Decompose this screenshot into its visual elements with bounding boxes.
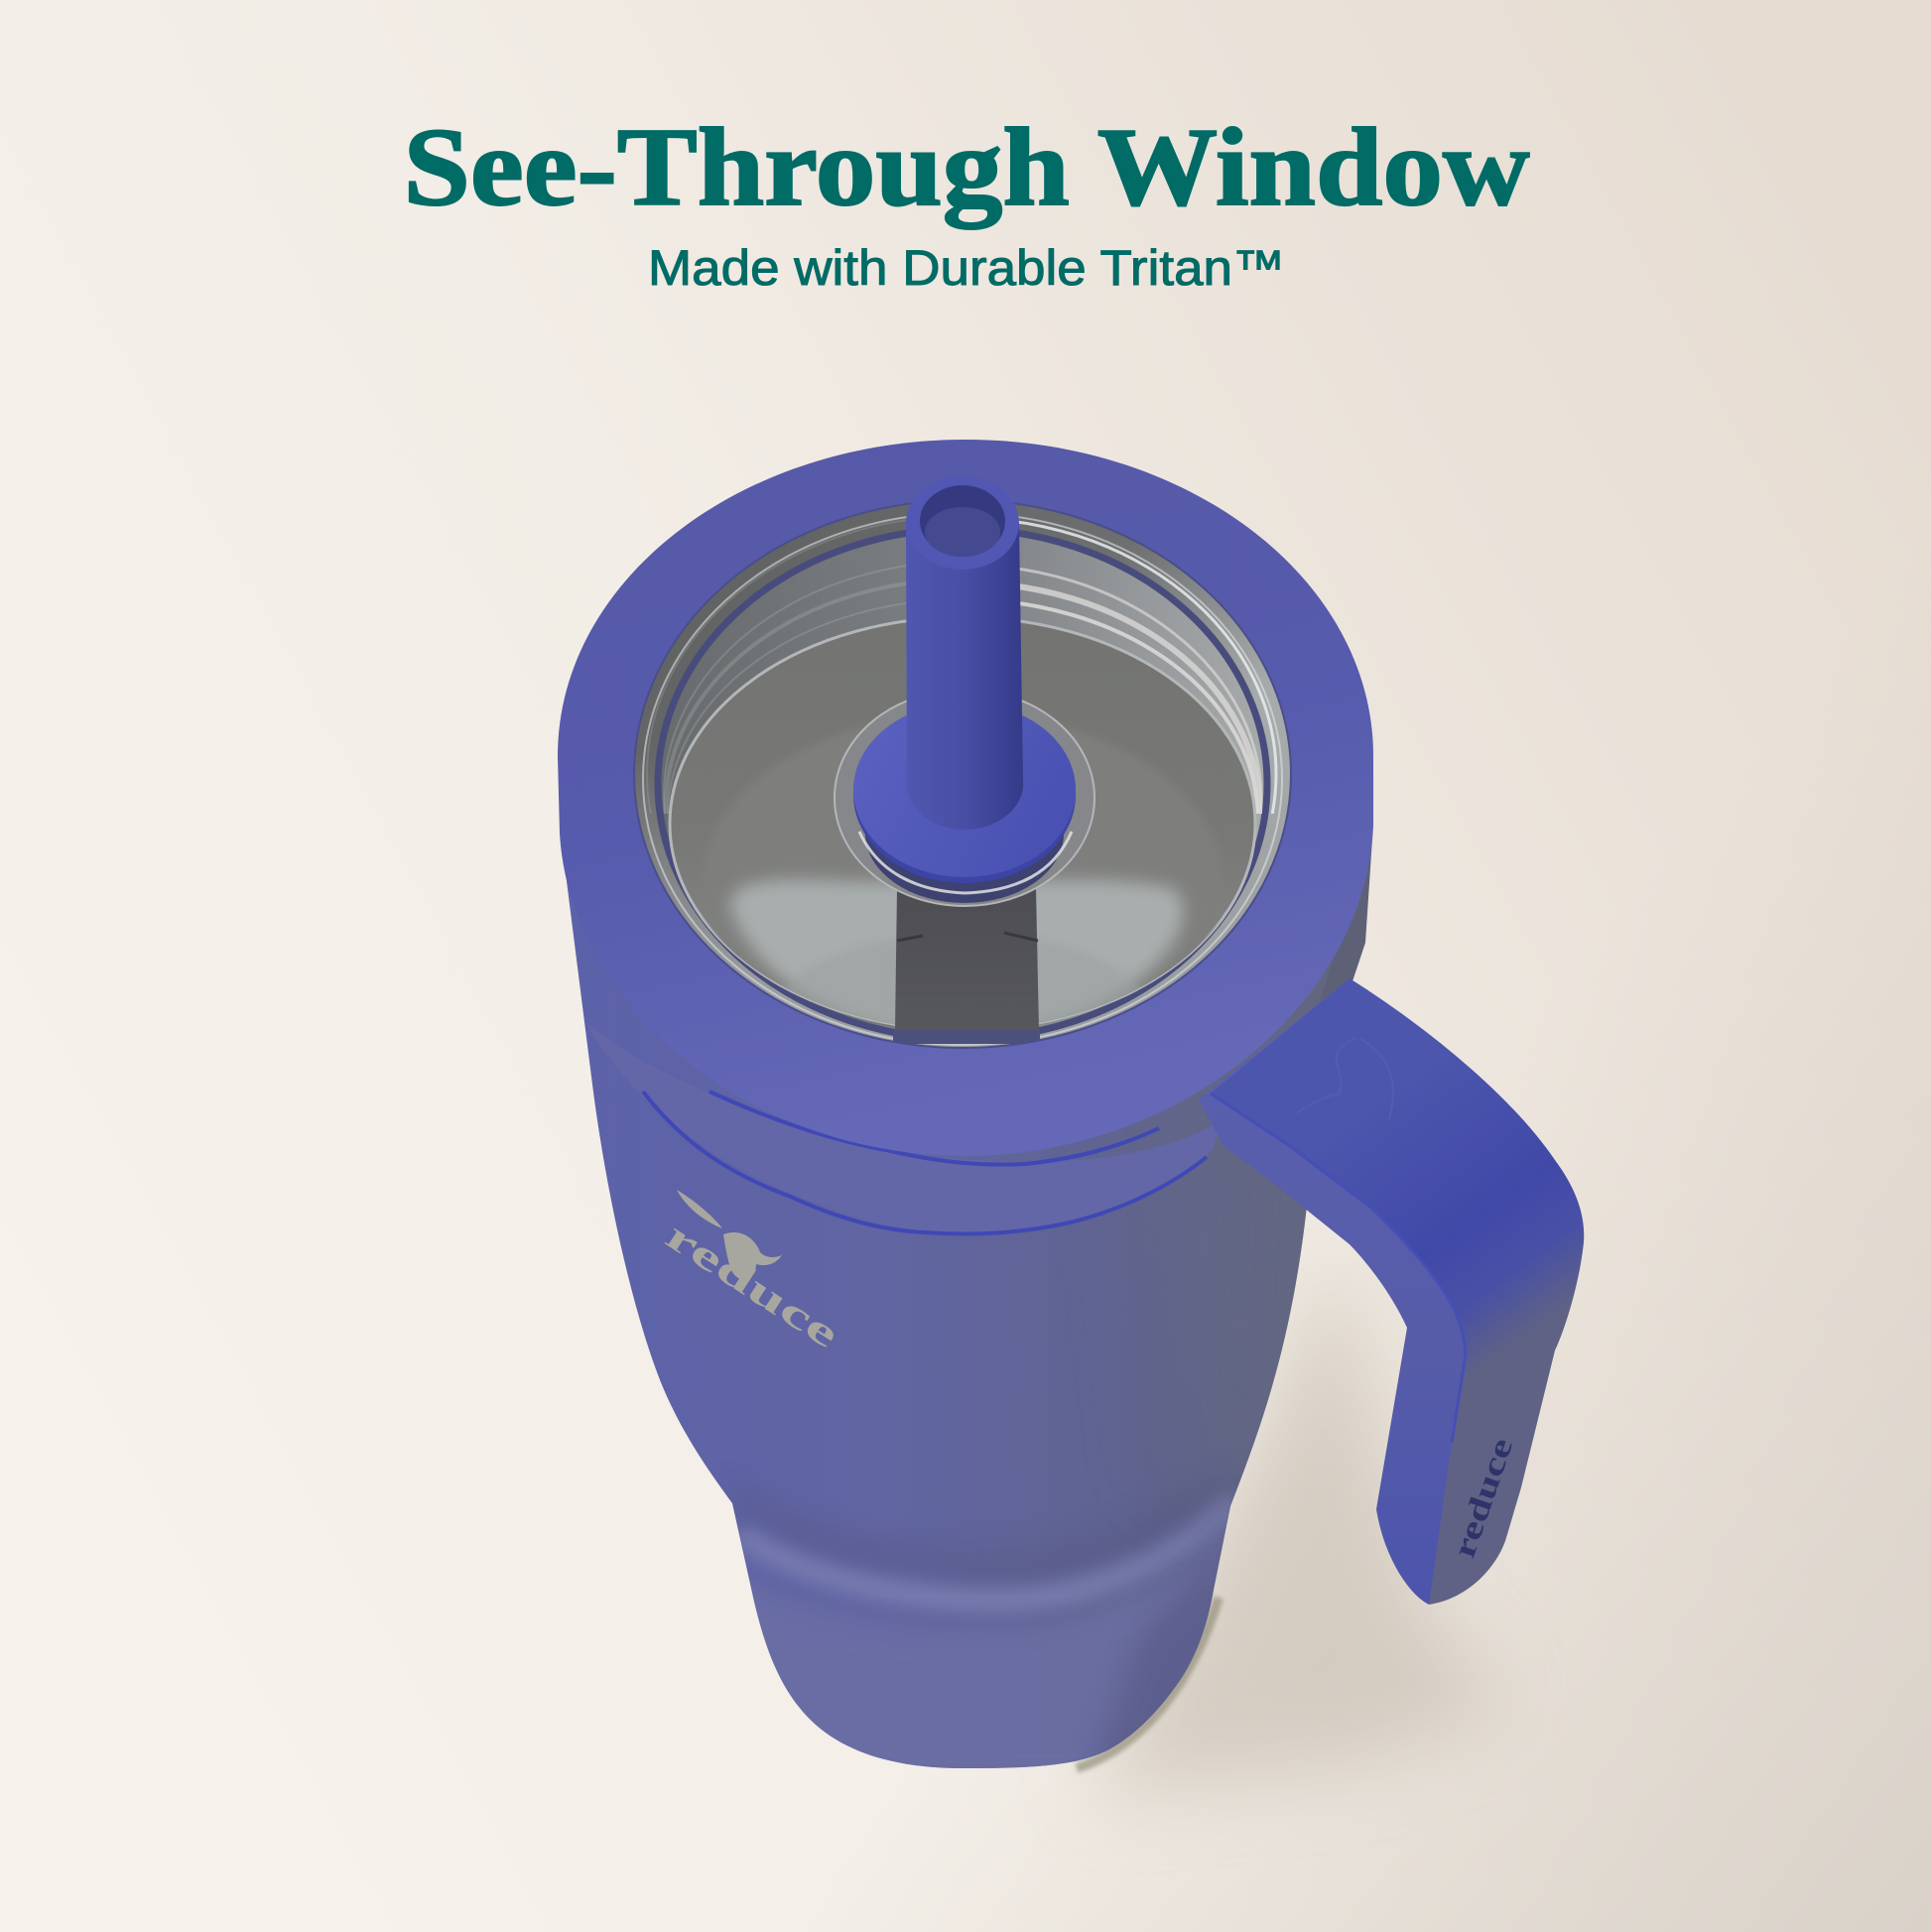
straw grommet [835, 690, 1094, 906]
lid rim [558, 440, 1373, 1156]
handle engraved wordmark: reduce [1446, 1433, 1519, 1562]
lower section lighter tone [749, 1524, 1226, 1768]
lid threads, right [1018, 520, 1278, 814]
tumbler [558, 440, 1584, 1796]
logo wordmark: reduce [658, 1213, 847, 1356]
straw [906, 476, 1023, 830]
right-side shade [1247, 1212, 1306, 1461]
logo leaves [677, 1190, 722, 1228]
handle side strip [1199, 978, 1583, 1605]
lower glass rim tone [634, 500, 1291, 1048]
lid threads, left [646, 519, 907, 814]
see-through window [633, 502, 1292, 1049]
handle front face [1211, 978, 1584, 1605]
subtitle: Made with Durable Tritan™ [648, 240, 1285, 296]
handle [1199, 978, 1584, 1605]
tumbler body [566, 873, 1350, 1786]
grommet highlight [859, 832, 1072, 893]
window floor [670, 617, 1255, 1030]
junction shadow [734, 1489, 1216, 1576]
base disc tone [705, 734, 1221, 1024]
collar band [585, 1022, 1221, 1233]
sliver of body above handle [1320, 824, 1373, 1002]
engraved logo [658, 1190, 847, 1356]
dark inner seal ring [658, 529, 1267, 1039]
floor shadow [1077, 1250, 1508, 1796]
grommet dark underside [865, 764, 1064, 903]
straw disc [853, 707, 1076, 883]
lower glass edge [643, 513, 1282, 1045]
floor reflection [730, 880, 1184, 1037]
lower section junction highlight [739, 1498, 1235, 1600]
handle embossed leaf mark [1297, 1038, 1393, 1119]
handle edge line [1211, 1094, 1466, 1443]
straw seen through the base [895, 888, 1039, 1030]
title: See-Through Window [403, 106, 1530, 229]
